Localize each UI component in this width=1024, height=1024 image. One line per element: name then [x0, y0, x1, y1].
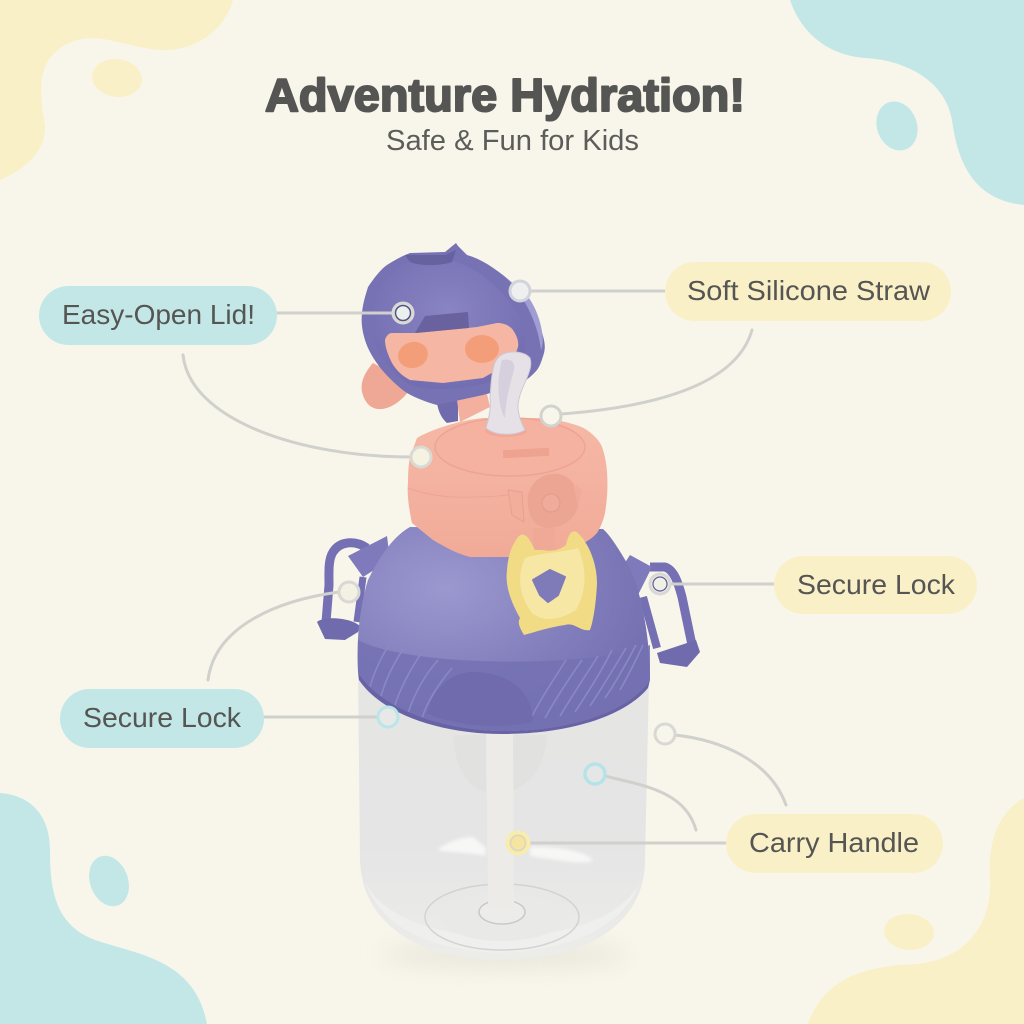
marker: jar straw [507, 832, 529, 854]
right handle [615, 555, 700, 667]
marker: outside jar [655, 724, 675, 744]
label: Carry Handle [726, 814, 943, 873]
bottle shadow [380, 943, 630, 967]
yellow lock tag [507, 531, 597, 635]
connector lines [183, 291, 786, 843]
label: Secure Lock right [774, 556, 977, 614]
marker: jar top [378, 707, 398, 727]
chin tab [362, 363, 408, 409]
lock button [508, 474, 582, 550]
marker: straw base [541, 406, 561, 426]
label: Easy-Open Lid!: Easy-Open Lid! [62, 299, 255, 330]
marker: left handle [339, 582, 359, 602]
marker: right handle [650, 574, 670, 594]
peach cap body [408, 418, 607, 557]
label: Easy-Open Lid! [39, 286, 277, 345]
purple shoulder [357, 527, 650, 734]
marker: cap edge [411, 447, 431, 467]
label: Soft Silicone Straw: Soft Silicone Straw [687, 275, 931, 306]
marker: easy-open lid [393, 303, 413, 323]
label: Soft Silicone Straw [665, 262, 951, 321]
lid insert [385, 323, 518, 383]
open flip lid [362, 243, 545, 423]
left handle [317, 536, 390, 640]
label: Secure Lock left [60, 689, 264, 748]
clear jar [358, 670, 649, 960]
label: Carry Handle: Carry Handle [749, 827, 919, 858]
lid hinge [437, 398, 458, 423]
label: Secure Lock right: Secure Lock [797, 569, 956, 600]
subtitle: Safe & Fun for Kids [386, 125, 639, 157]
bottle illustration [317, 243, 700, 967]
marker: silicone straw top [510, 281, 530, 301]
marker: jar middle [585, 764, 605, 784]
silicone straw [485, 352, 531, 437]
title: Adventure Hydration! [265, 69, 745, 121]
inner straw [486, 732, 514, 909]
label: Secure Lock left: Secure Lock [83, 702, 242, 733]
